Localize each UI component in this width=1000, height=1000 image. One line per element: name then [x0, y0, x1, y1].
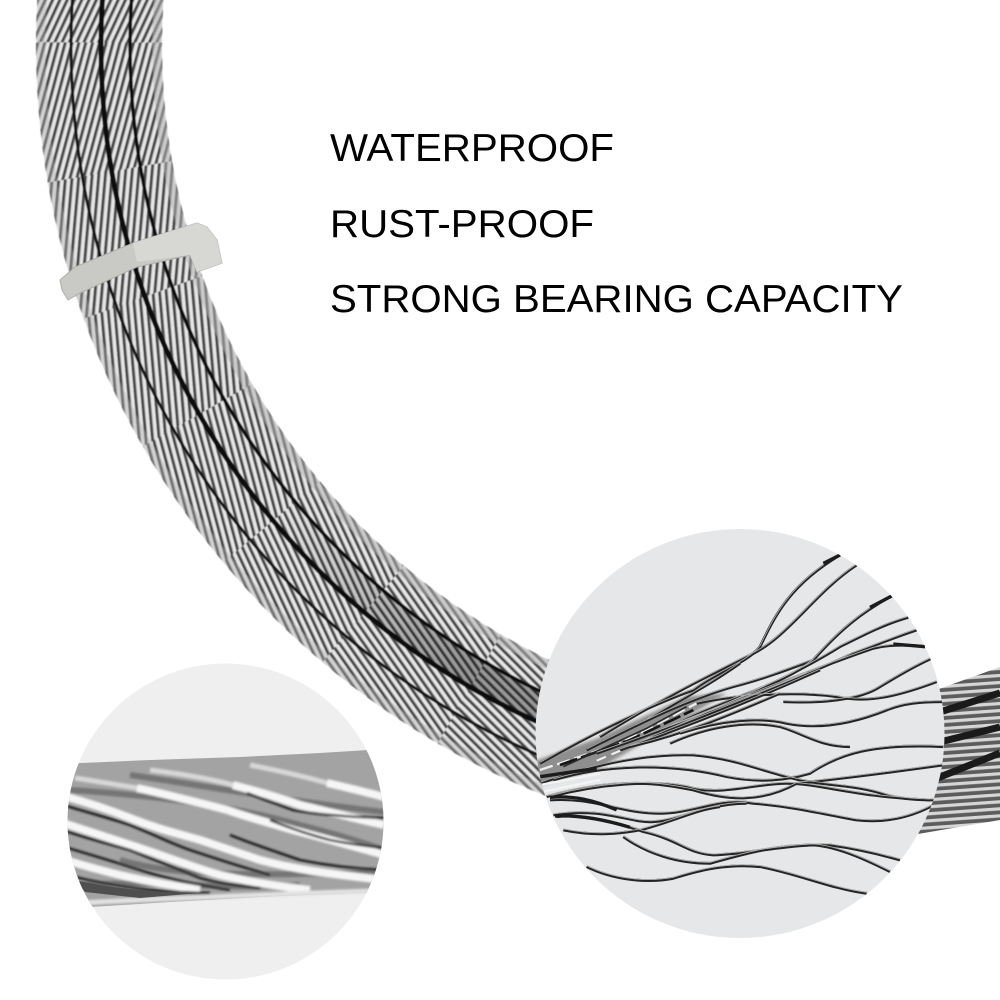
zip tie: [60, 223, 222, 300]
feature: rust-proof: RUST-PROOF: [330, 203, 594, 246]
heading text: [330, 127, 903, 321]
detail circle: loose fanned wires: [533, 529, 944, 938]
right end of cables: [918, 667, 1000, 834]
feature: waterproof: WATERPROOF: [330, 127, 614, 170]
frayed rope bundle: [533, 693, 727, 787]
feature: strong bearing capacity: STRONG BEARING CAPACITY: [330, 278, 903, 321]
coiled steel cable bundle: [35, 0, 550, 797]
detail circle: twisted cable close-up: [60, 664, 384, 980]
thick strands at the rope root: [540, 555, 925, 827]
